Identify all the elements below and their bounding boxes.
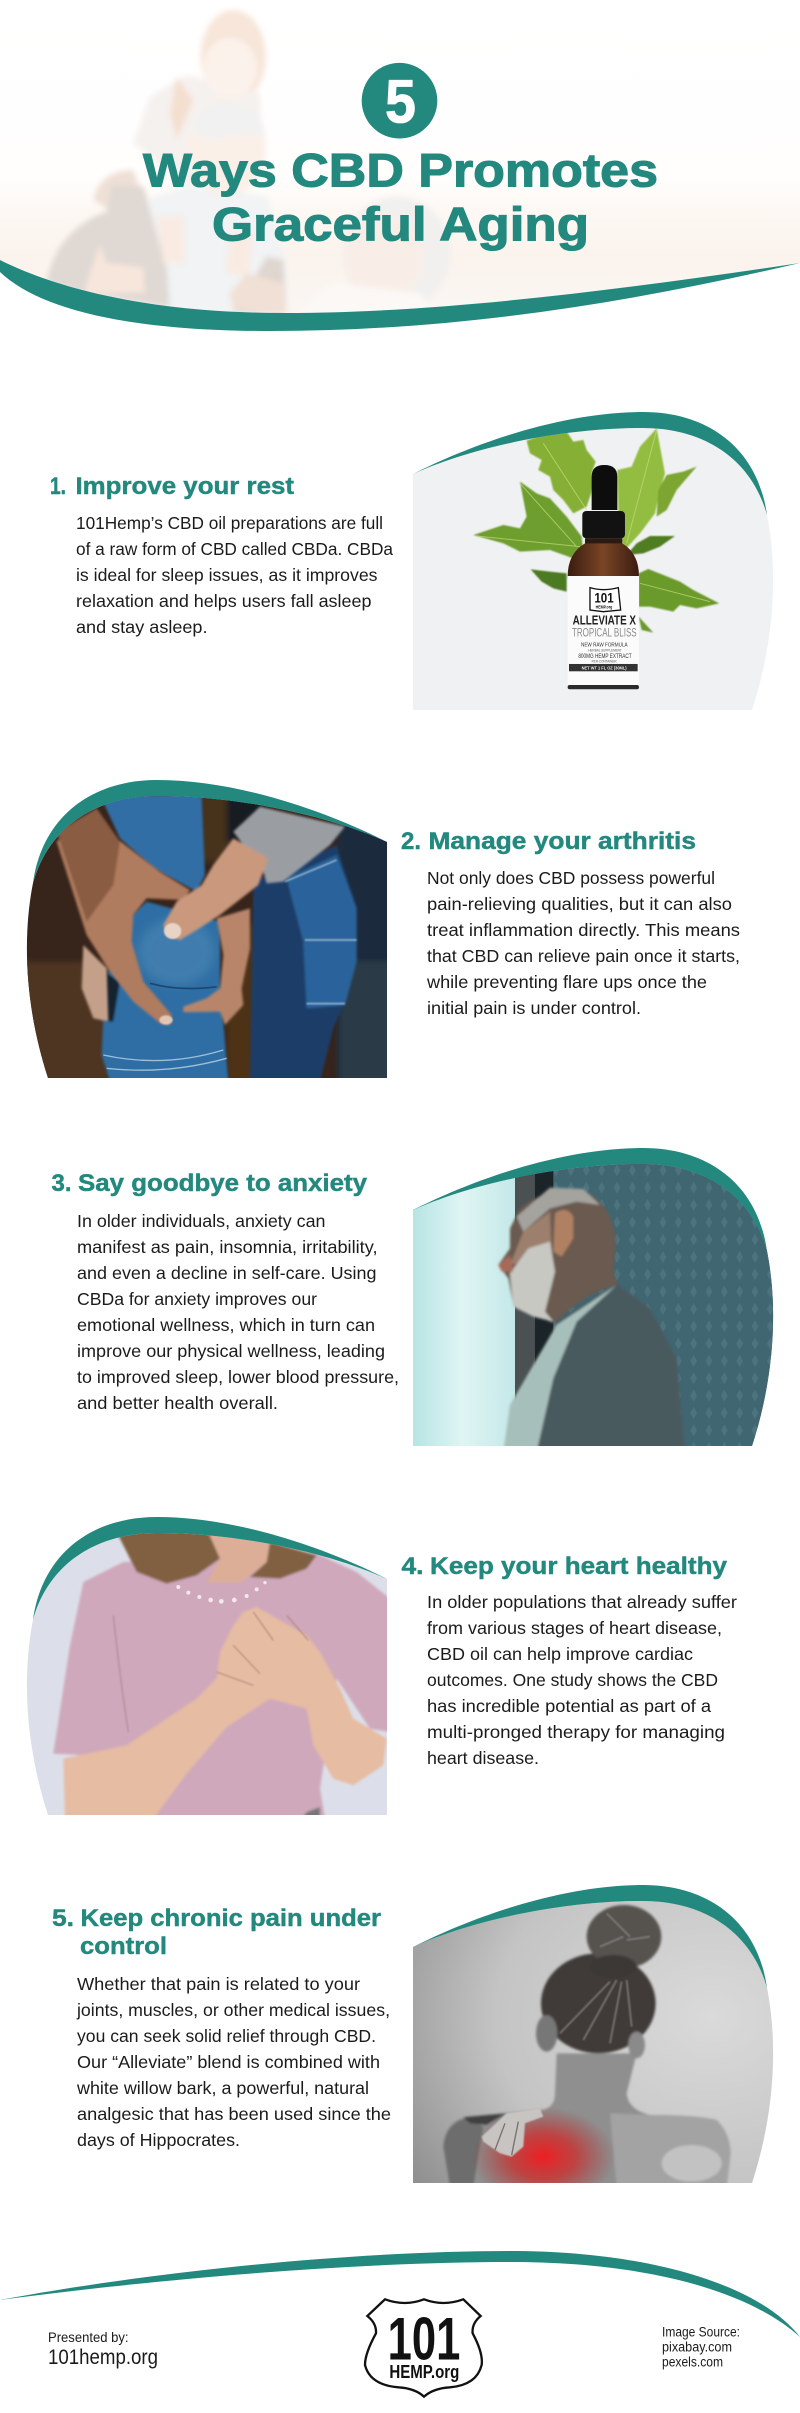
body text 4: CBD oil can help improve cardiac: [427, 1644, 693, 1664]
logo: 101 hemp shield: [365, 2299, 482, 2397]
bottle: HERBAL SUPPLEMENT: [588, 648, 622, 652]
body text 1: relaxation and helps users fall asleep: [76, 591, 372, 611]
body text 4: from various stages of heart disease,: [427, 1618, 722, 1638]
teal arc 1: [413, 412, 767, 515]
logo: 101 hemp shield: HEMP.org: [389, 2361, 459, 2382]
header photo: grandparents carrying a child, washed out: [0, 0, 800, 320]
bottle: NEW RAW FORMULA: [581, 643, 628, 649]
body text 5: joints, muscles, or other medical issues,: [76, 2000, 390, 2020]
body text 5: days of Hippocrates.: [77, 2130, 240, 2150]
teal arc 3: [413, 1148, 767, 1251]
heading 1: 1.: [50, 473, 66, 500]
body text 1: is ideal for sleep issues, as it improves: [76, 565, 378, 585]
bottle: ALLEVIATE X: [573, 613, 636, 627]
body text 3: and better health overall.: [77, 1393, 278, 1413]
body text 2: Not only does CBD possess powerful: [427, 868, 715, 888]
body text 1: [76, 513, 393, 637]
heading 2: 2.: [401, 828, 421, 855]
bottle: 101: [594, 590, 614, 606]
body text 2: that CBD can relieve pain once it starts,: [427, 946, 740, 966]
title: [143, 144, 658, 251]
image sources: pexels.com: [662, 2354, 723, 2370]
body text 1: and stay asleep.: [76, 617, 208, 637]
photo: woman holding her chest: [20, 1505, 390, 1825]
body text 4: In older populations that already suffer: [427, 1592, 737, 1612]
bottle: HEMP.org: [596, 605, 612, 610]
heading 5: control: [80, 1933, 167, 1960]
footer teal swoosh: [0, 2251, 800, 2337]
image sources: [662, 2324, 740, 2370]
footer: [0, 2251, 800, 2397]
title: Ways CBD Promotes: [143, 144, 658, 197]
title: Graceful Aging: [212, 198, 589, 251]
body text 5: you can seek solid relief through CBD.: [77, 2026, 376, 2046]
body text 4: multi-pronged therapy for managing: [427, 1722, 725, 1742]
body text 5: Whether that pain is related to your: [77, 1974, 360, 1994]
body text 2: while preventing flare ups once the: [426, 972, 707, 992]
heading 5: Keep chronic pain under: [80, 1905, 381, 1932]
header banner: [0, 0, 800, 331]
photo: hands holding a knee: [26, 780, 387, 1078]
heading 3: 3.: [52, 1170, 72, 1197]
bottle: TROPICAL BLISS: [572, 626, 637, 640]
body text 5: analgesic that has been used since the: [77, 2104, 391, 2124]
image sources: pixabay.com: [662, 2340, 732, 2354]
heading 5: [52, 1905, 381, 1960]
body text 3: In older individuals, anxiety can: [77, 1211, 326, 1231]
presented by: [48, 2329, 158, 2369]
photo: woman with shoulder pain, red highlight: [413, 1885, 774, 2183]
teal arc 2: [33, 780, 387, 883]
presented by: 101hemp.org: [48, 2346, 158, 2369]
teal arc 5: [413, 1885, 767, 1988]
heading 4: Keep your heart healthy: [430, 1553, 728, 1580]
panel: 2 manage your arthritis: [20, 768, 740, 1088]
teal arc 4: [33, 1517, 387, 1620]
body text 4: [427, 1592, 737, 1768]
body text 4: has incredible potential as part of a: [427, 1696, 711, 1716]
heading 2: Manage your arthritis: [428, 828, 696, 855]
body text 2: treat inflammation directly. This means: [427, 920, 740, 940]
bottle: PER CONTAINER: [592, 660, 617, 664]
heading 4: 4.: [402, 1553, 424, 1580]
bottle: [568, 465, 639, 689]
header teal swoosh: [0, 260, 800, 331]
body text 1: 101Hemp’s CBD oil preparations are full: [76, 513, 383, 533]
logo: 101 hemp shield: 101: [388, 2305, 460, 2372]
body text 3: [77, 1211, 399, 1413]
image sources: Image Source:: [662, 2324, 740, 2340]
presented by: Presented by:: [48, 2329, 128, 2345]
heading 5: 5.: [52, 1905, 74, 1932]
photo: older man at a window: [413, 1148, 774, 1446]
body text 4: heart disease.: [427, 1748, 539, 1768]
body text 2: pain-relieving qualities, but it can also: [427, 894, 732, 914]
body text 3: to improved sleep, lower blood pressure,: [77, 1367, 399, 1387]
heading 3: Say goodbye to anxiety: [78, 1170, 368, 1197]
body text 3: emotional wellness, which in turn can: [77, 1315, 375, 1335]
bottle: 800MG HEMP EXTRACT: [578, 654, 632, 660]
panel: 5 keep chronic pain under control: [52, 1885, 774, 2183]
heading 1: Improve your rest: [76, 473, 294, 500]
bottle: NET WT 1 FL OZ (30ML): [582, 666, 627, 671]
body text 3: manifest as pain, insomnia, irritability,: [77, 1237, 378, 1257]
body text 3: and even a decline in self-care. Using: [77, 1263, 376, 1283]
body text 5: [76, 1974, 391, 2150]
body text 5: Our “Alleviate” blend is combined with: [77, 2052, 380, 2072]
number badge: [362, 63, 437, 139]
panel: 4 keep your heart healthy: [20, 1505, 737, 1825]
body text 1: of a raw form of CBD called CBDa. CBDa: [76, 539, 393, 559]
panel: 1 improve your rest: [51, 412, 773, 710]
panel: 3 say goodbye to anxiety: [52, 1148, 774, 1446]
body text 3: CBDa for anxiety improves our: [77, 1289, 317, 1309]
body text 3: improve our physical wellness, leading: [77, 1341, 385, 1361]
body text 2: initial pain is under control.: [427, 998, 641, 1018]
body text 5: white willow bark, a powerful, natural: [76, 2078, 369, 2098]
photo: CBD bottle with hemp leaves: [413, 428, 773, 710]
body text 4: outcomes. One study shows the CBD: [427, 1670, 718, 1690]
body text 2: [426, 868, 740, 1018]
number badge: 5: [385, 68, 416, 136]
